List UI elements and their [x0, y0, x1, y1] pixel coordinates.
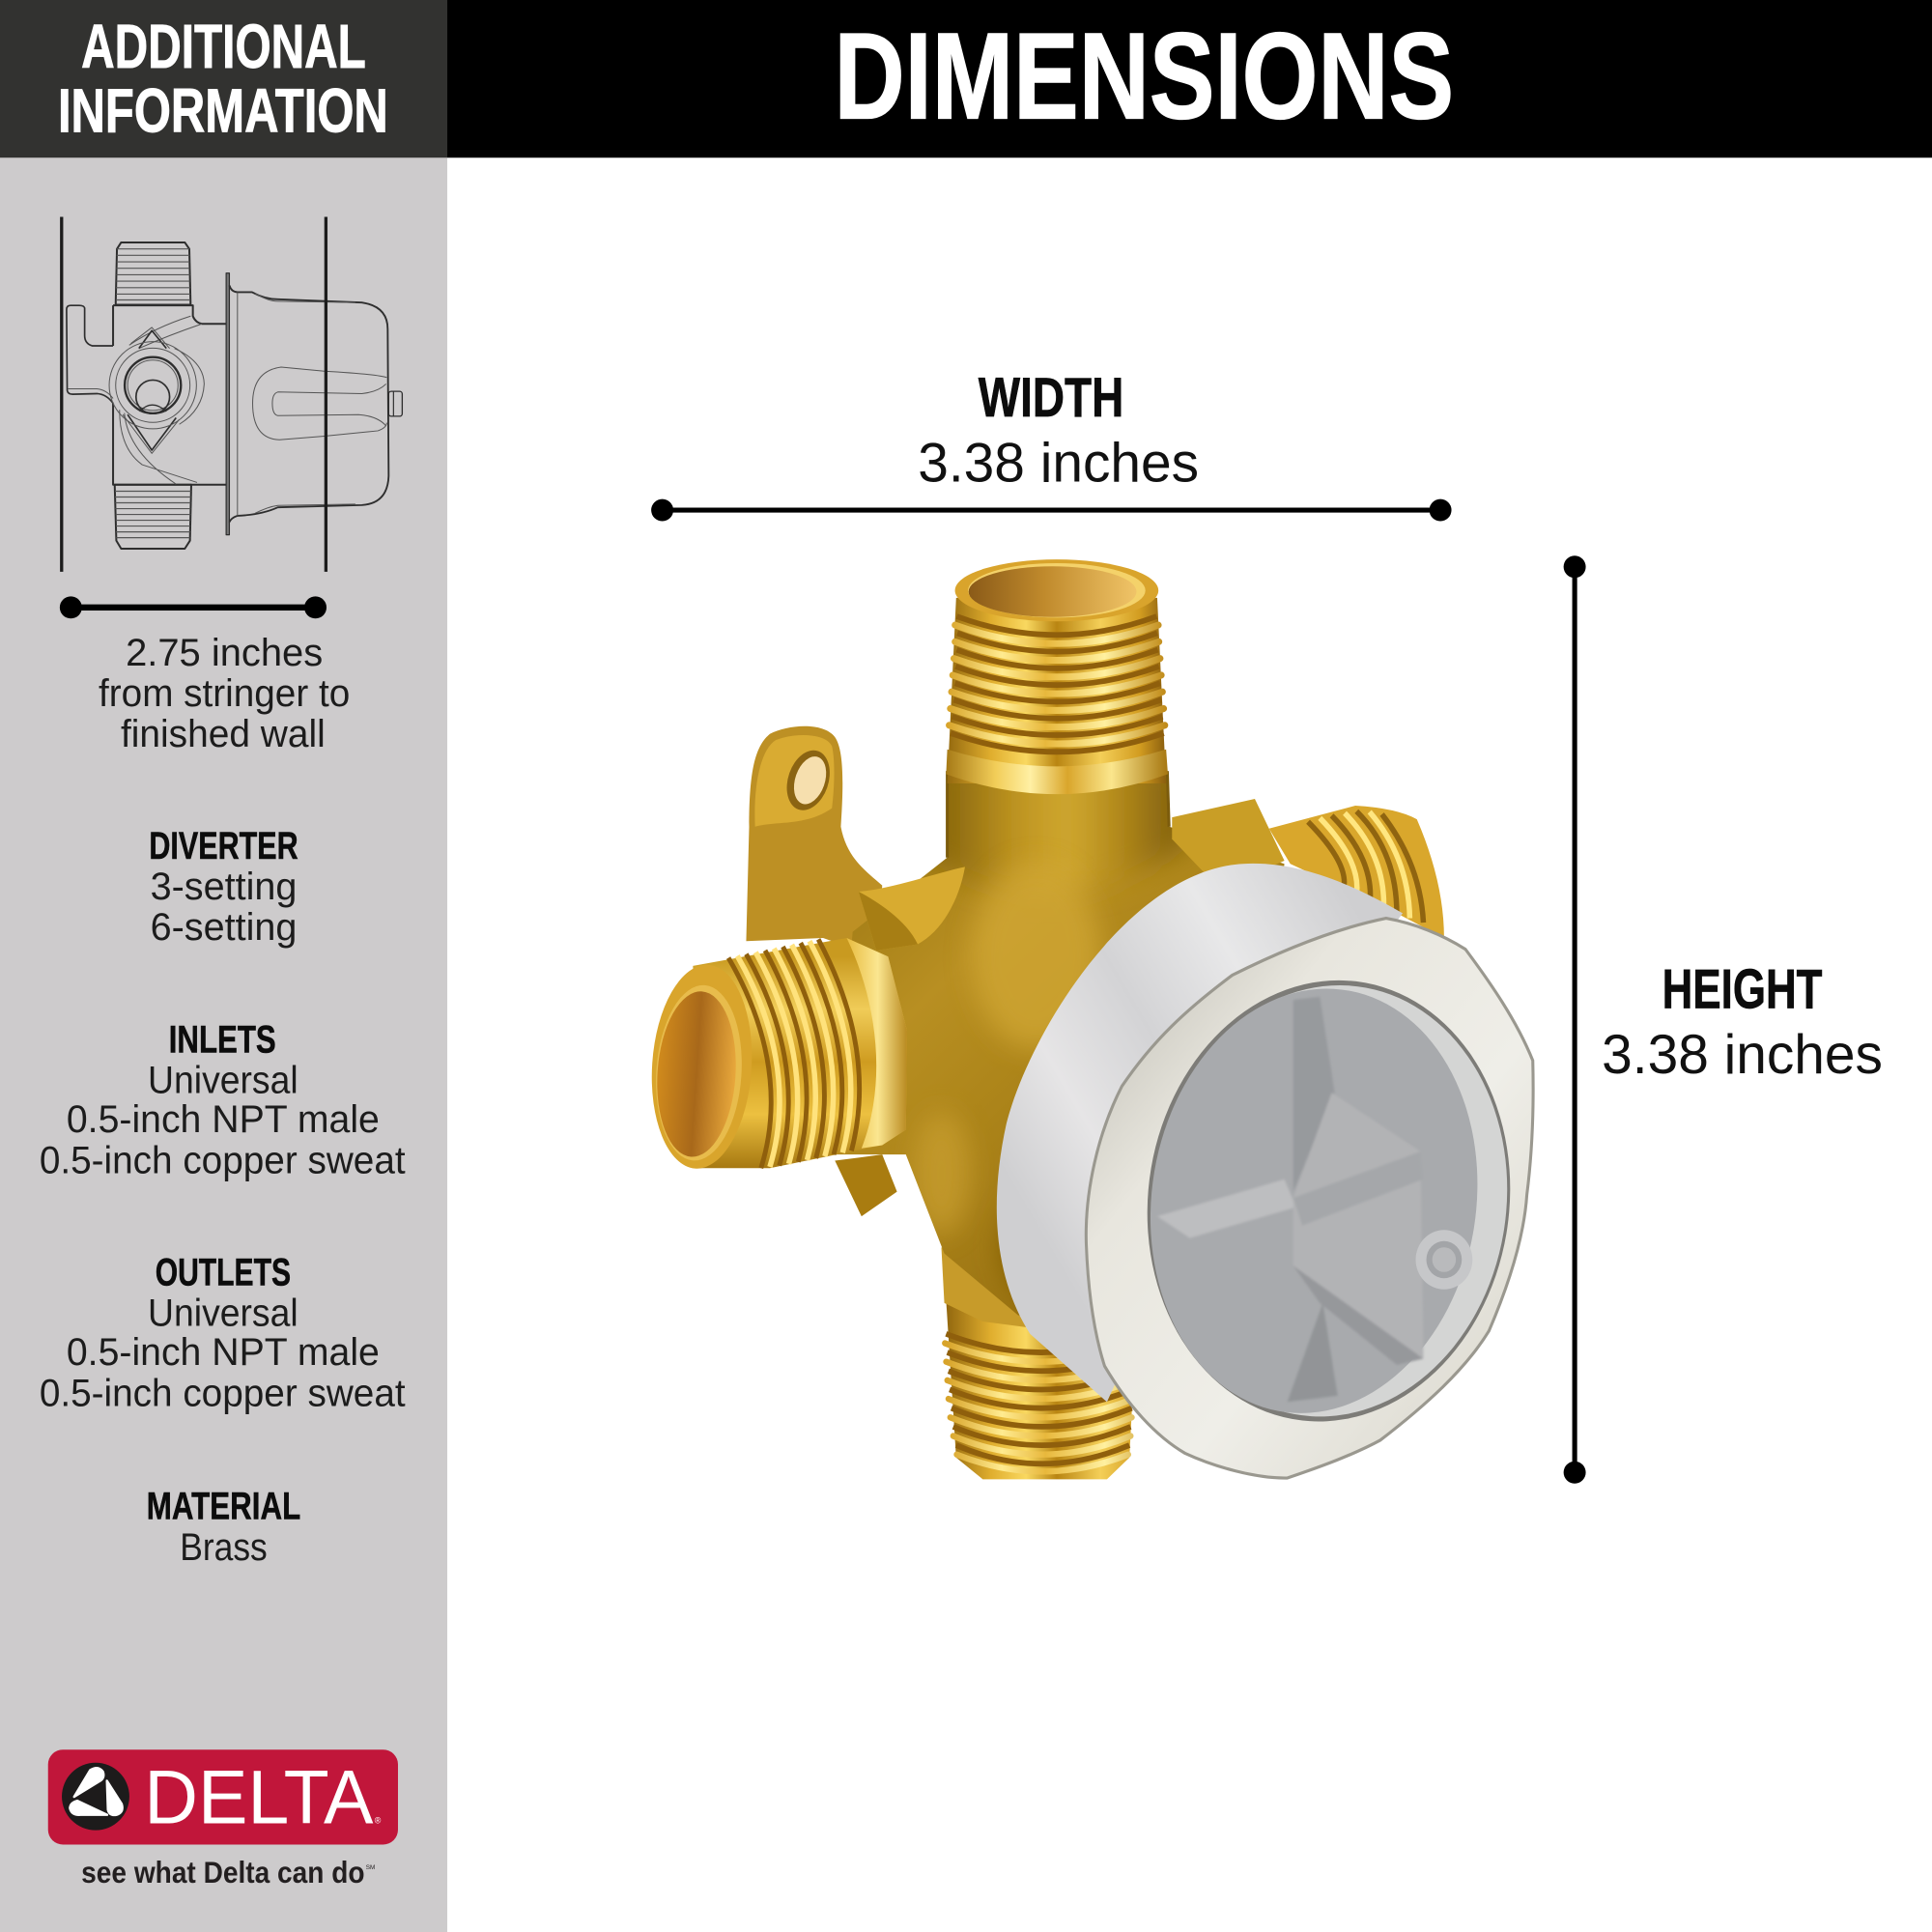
panel: additional information header: INFORMATION	[58, 75, 388, 145]
logo: delta: see what Delta can do	[81, 1855, 365, 1889]
text: stringer distance: finished wall	[121, 713, 326, 755]
text: outlets: OUTLETS	[156, 1251, 291, 1293]
logo: delta: DELTA	[144, 1754, 374, 1840]
valve: wings	[835, 799, 1285, 1216]
valve: rear right pipe	[1269, 806, 1444, 938]
text: outlets: 0.5-inch copper sweat	[40, 1372, 406, 1414]
label: height: HEIGHT	[1662, 958, 1822, 1020]
logo: delta	[48, 1749, 398, 1889]
text: inlets: 0.5-inch copper sweat	[40, 1139, 406, 1181]
valve: silver sleeve	[997, 864, 1403, 1402]
arrow: stringer-to-wall dimension	[60, 596, 327, 618]
logo: delta: ®	[375, 1816, 382, 1826]
text: inlets: Universal	[148, 1059, 298, 1101]
label: height	[1602, 958, 1883, 1086]
panel: sidebar	[0, 157, 447, 1932]
text: outlets: 0.5-inch NPT male	[67, 1331, 380, 1374]
valve: hex nut	[1086, 919, 1533, 1478]
label: width: 3.38 inches	[918, 433, 1199, 495]
label: width: WIDTH	[979, 367, 1123, 429]
label: height: 3.38 inches	[1602, 1024, 1883, 1086]
title: dimensions	[447, 0, 1932, 157]
text: stringer distance	[99, 632, 350, 755]
valve: main body	[835, 758, 1285, 1340]
valve: plastic cap	[1115, 951, 1543, 1452]
panel: additional information header	[0, 0, 447, 157]
text: material: MATERIAL	[147, 1486, 300, 1528]
label: width	[918, 367, 1199, 495]
diagram: stud lines	[62, 216, 326, 572]
text: material	[147, 1486, 300, 1569]
valve: mounting tab	[746, 726, 882, 956]
text: stringer distance: from stringer to	[99, 672, 350, 715]
text: diverter: 3-setting	[151, 866, 297, 908]
valve: bottom pipe	[941, 1247, 1138, 1479]
text: inlets: 0.5-inch NPT male	[67, 1098, 380, 1141]
text: stringer distance: 2.75 inches	[126, 632, 323, 674]
arrow: height dimension	[1564, 555, 1586, 1484]
arrow: width dimension	[651, 499, 1452, 522]
panel: additional information header: ADDITIONAL	[81, 12, 366, 81]
valve: left pipe	[645, 938, 907, 1172]
text: diverter: DIVERTER	[149, 825, 298, 867]
text: material: Brass	[180, 1526, 268, 1569]
text: inlets	[40, 1018, 406, 1181]
text: diverter: 6-setting	[151, 906, 297, 949]
photo: brass valve	[645, 559, 1543, 1479]
text: inlets: INLETS	[169, 1018, 276, 1061]
title: dimensions: DIMENSIONS	[835, 8, 1454, 145]
logo: delta: SM	[366, 1864, 375, 1871]
text: outlets: Universal	[148, 1292, 298, 1334]
valve: top pipe	[946, 559, 1168, 794]
text: diverter	[149, 825, 298, 949]
text: outlets	[40, 1251, 406, 1414]
diagram: valve side-view line drawing	[67, 242, 402, 549]
